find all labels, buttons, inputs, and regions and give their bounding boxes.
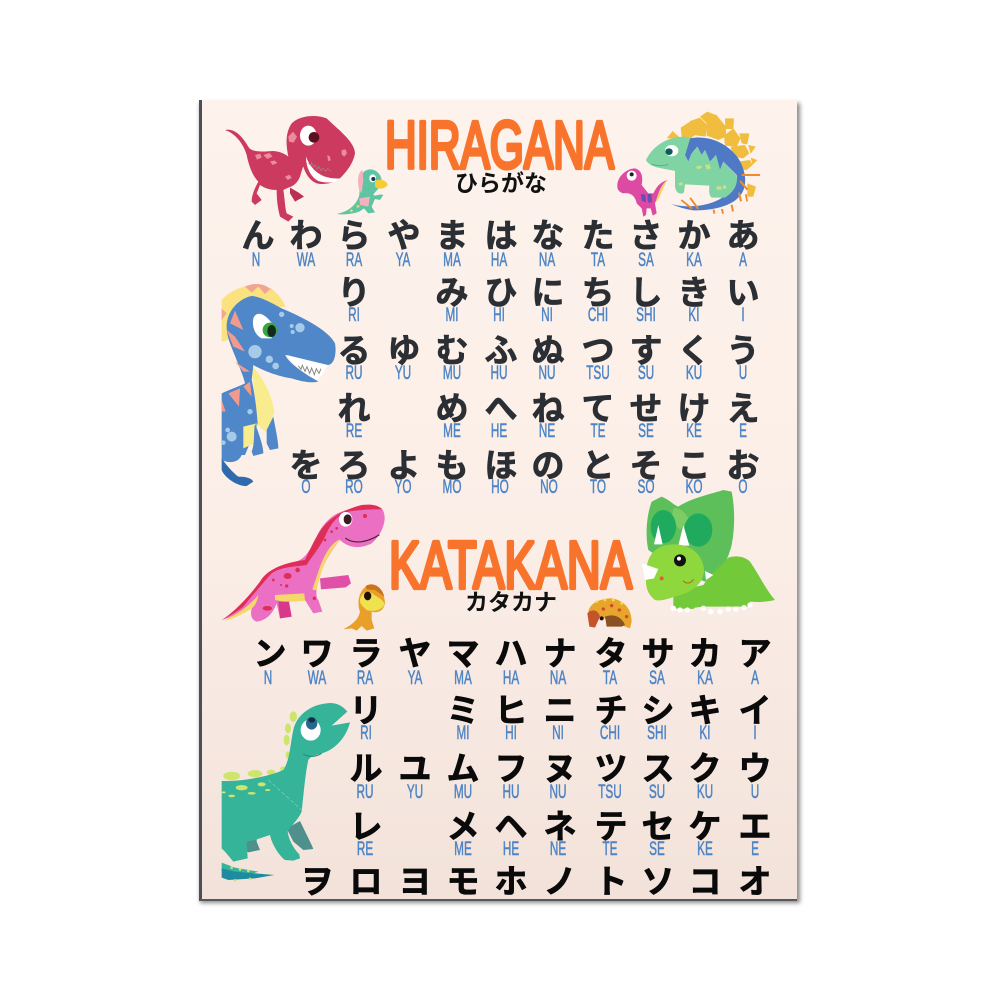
row: a-line: サ xyxy=(642,635,674,672)
row: i-line: SHI xyxy=(647,723,667,744)
row: o-line: よ xyxy=(388,447,420,484)
row: e-line: TE xyxy=(602,839,618,860)
row: e-line: け xyxy=(678,390,710,427)
row: u-line: す xyxy=(630,332,662,369)
row: e-line: TE xyxy=(590,421,606,442)
row: o-line xyxy=(290,447,760,498)
row: i-line: ヒ xyxy=(494,692,528,729)
row: a-line: KA xyxy=(686,250,702,271)
row: i-line: イ xyxy=(738,692,772,729)
row: e-line: HE xyxy=(491,421,507,442)
row: o-line: ノ xyxy=(544,863,576,900)
row: o-line: コ xyxy=(688,863,722,900)
row: e-line: SE xyxy=(638,421,654,442)
row: e-line: ME xyxy=(443,421,461,442)
row: e-line: ネ xyxy=(544,808,576,845)
row: o-line: RO xyxy=(345,477,363,498)
row: a-line: SA xyxy=(638,250,654,271)
row: e-line: て xyxy=(582,390,614,427)
row: o-line: モ xyxy=(446,863,480,900)
row: a-line: WA xyxy=(297,250,316,271)
row: u-line: ル xyxy=(350,750,382,787)
row: a-line: わ xyxy=(290,217,322,254)
row: e-line: KE xyxy=(697,839,713,860)
row: u-line: ぬ xyxy=(532,332,564,369)
row: u-line: つ xyxy=(582,332,614,369)
icon: orange ankylosaurus xyxy=(587,598,632,628)
row: u-line: ふ xyxy=(484,332,518,369)
row: i-line: り xyxy=(338,274,370,311)
row: i-line: NI xyxy=(541,305,553,326)
row: a-line: MA xyxy=(443,250,461,271)
row: o-line: オ xyxy=(738,863,772,900)
row: a-line: N xyxy=(252,250,260,271)
row: a-line: か xyxy=(678,217,710,254)
row: o-line: O xyxy=(738,477,748,498)
row: a-line: ん xyxy=(242,217,274,254)
row: a-line: YA xyxy=(408,668,423,689)
row: a-line: な xyxy=(532,217,564,254)
row: u-line: HU xyxy=(502,782,520,803)
row: o-line: ヲ xyxy=(300,863,334,900)
row: i-line: き xyxy=(678,274,710,311)
row: i-line: い xyxy=(726,274,760,311)
row: i-line: し xyxy=(630,274,662,311)
subtitle: hiragana in Japanese: ひらがな xyxy=(455,170,547,196)
row: i-line: HI xyxy=(493,305,505,326)
row: u-line: う xyxy=(726,332,760,369)
row: e-line: SE xyxy=(649,839,665,860)
row: u-line: HU xyxy=(490,363,508,384)
row: u-line: SU xyxy=(638,363,654,384)
row: u-line: NU xyxy=(549,782,567,803)
row: i-line: ち xyxy=(582,274,614,311)
row: i-line: CHI xyxy=(600,723,620,744)
row: i-line: チ xyxy=(594,692,628,729)
row: i-line: HI xyxy=(505,723,517,744)
row: e-line: RE xyxy=(346,421,362,442)
row: u-line: NU xyxy=(538,363,556,384)
subtitle: katakana in Japanese: カタカナ xyxy=(465,589,557,615)
row: o-line: お xyxy=(726,447,760,484)
row: u-line xyxy=(350,750,772,803)
hiragana grid xyxy=(242,217,760,498)
row: u-line: る xyxy=(338,332,370,369)
icon: small pink dinosaur xyxy=(617,168,667,217)
row: i-line: RI xyxy=(348,305,360,326)
row: o-line: SO xyxy=(637,477,655,498)
row: u-line: ム xyxy=(446,750,480,787)
row: a-line: KA xyxy=(697,668,713,689)
row: a-line: さ xyxy=(630,217,662,254)
row: u-line: RU xyxy=(345,363,363,384)
icon: teal dinosaur xyxy=(222,703,350,862)
row: i-line: RI xyxy=(360,723,372,744)
row: u-line: RU xyxy=(356,782,374,803)
row: i-line: ミ xyxy=(446,692,480,729)
row: i-line: に xyxy=(532,274,564,311)
row: u-line: TSU xyxy=(598,782,622,803)
row: i-line: シ xyxy=(642,692,674,729)
row: e-line: え xyxy=(726,390,760,427)
row: a-line: YA xyxy=(396,250,411,271)
row: a-line: HA xyxy=(491,250,508,271)
title: KATAKANA: KATAKANA xyxy=(389,528,632,603)
row: u-line xyxy=(338,332,760,384)
row: i-line: I xyxy=(741,305,745,326)
row: a-line: あ xyxy=(726,217,760,254)
row: a-line: ハ xyxy=(494,635,528,672)
row: e-line: れ xyxy=(338,390,370,427)
row: u-line: YU xyxy=(395,363,411,384)
row: o-line: O xyxy=(301,477,311,498)
row: e-line: KE xyxy=(686,421,702,442)
row: a-line: NA xyxy=(550,668,567,689)
row: i-line xyxy=(350,692,772,744)
row: a-line: MA xyxy=(454,668,472,689)
row: a-line: た xyxy=(582,217,614,254)
row: e-line: NE xyxy=(550,839,566,860)
row: i-line: KI xyxy=(688,305,700,326)
row: e-line: E xyxy=(751,839,759,860)
row: a-line: ナ xyxy=(544,635,576,672)
row: i-line: KI xyxy=(699,723,711,744)
row: i-line: I xyxy=(753,723,757,744)
row: a-line xyxy=(254,635,772,689)
row: i-line xyxy=(338,274,760,326)
row: i-line: キ xyxy=(688,692,722,729)
row: i-line: リ xyxy=(350,692,382,729)
row: o-line: も xyxy=(436,447,468,484)
row: o-line: と xyxy=(582,447,614,484)
row: i-line: MI xyxy=(456,723,470,744)
icon: red t-rex xyxy=(225,116,355,222)
icon: blue dinosaur xyxy=(221,284,336,486)
row: e-line: ヘ xyxy=(494,808,528,845)
row: u-line: ユ xyxy=(398,750,432,787)
row: u-line: ウ xyxy=(738,750,772,787)
row: e-line: セ xyxy=(642,808,674,845)
row: a-line: NA xyxy=(539,250,556,271)
row: o-line: KO xyxy=(685,477,703,498)
row: o-line: ろ xyxy=(338,447,370,484)
row: e-line: テ xyxy=(594,808,628,845)
row: a-line: HA xyxy=(503,668,520,689)
row: o-line: ほ xyxy=(484,447,518,484)
row: o-line: ソ xyxy=(642,863,674,900)
row: o-line: そ xyxy=(630,447,662,484)
row: a-line: ま xyxy=(436,217,468,254)
row: e-line: HE xyxy=(503,839,519,860)
row: u-line: む xyxy=(436,332,468,369)
row: u-line: TSU xyxy=(586,363,610,384)
row: u-line: フ xyxy=(494,750,528,787)
title: HIRAGANA: HIRAGANA xyxy=(385,108,614,183)
row: u-line: YU xyxy=(407,782,423,803)
row: a-line: WA xyxy=(308,668,327,689)
row: a-line: ン xyxy=(254,635,286,672)
row: o-line: TO xyxy=(590,477,606,498)
row: i-line: CHI xyxy=(588,305,608,326)
row: u-line: く xyxy=(678,332,710,369)
row: a-line: ワ xyxy=(300,635,334,672)
row: o-line: YO xyxy=(394,477,412,498)
icon: small teal dinosaur xyxy=(337,169,388,214)
icon: green triceratops xyxy=(642,490,775,614)
row: o-line: MO xyxy=(443,477,461,498)
row: i-line: MI xyxy=(445,305,459,326)
row: i-line: NI xyxy=(552,723,564,744)
row: e-line: ね xyxy=(532,390,564,427)
row: o-line: ロ xyxy=(350,863,382,900)
row: a-line: や xyxy=(388,217,420,254)
row: o-line: ホ xyxy=(494,863,528,900)
row: e-line: メ xyxy=(446,808,480,845)
row: u-line: U xyxy=(739,363,747,384)
row: u-line: KU xyxy=(697,782,713,803)
row: a-line: ヤ xyxy=(398,635,432,672)
row: e-line: へ xyxy=(484,390,518,427)
row: a-line: A xyxy=(739,250,747,271)
row: u-line: KU xyxy=(686,363,702,384)
row: a-line: TA xyxy=(591,250,605,271)
row: a-line: SA xyxy=(649,668,665,689)
row: o-line: ヨ xyxy=(398,863,432,900)
row: e-line: ME xyxy=(454,839,472,860)
row: o-line: NO xyxy=(540,477,558,498)
icon: small orange dinosaur xyxy=(343,584,385,631)
row: a-line: タ xyxy=(594,635,628,672)
row: e-line xyxy=(338,390,760,442)
row: o-line: こ xyxy=(678,447,710,484)
poster panel xyxy=(199,100,800,903)
row: i-line: ひ xyxy=(484,274,518,311)
row: e-line: せ xyxy=(630,390,662,427)
row: a-line: カ xyxy=(688,635,722,672)
row: e-line: レ xyxy=(350,808,382,845)
row: e-line xyxy=(350,808,772,860)
row: i-line: SHI xyxy=(636,305,656,326)
row: a-line: A xyxy=(751,668,759,689)
row: i-line: ニ xyxy=(544,692,576,729)
row: o-line: の xyxy=(532,447,564,484)
row: e-line: め xyxy=(436,390,468,427)
row: o-line xyxy=(300,863,772,900)
katakana grid xyxy=(254,635,772,900)
row: u-line: ゆ xyxy=(388,332,420,369)
row: a-line: RA xyxy=(346,250,363,271)
row: a-line: ら xyxy=(338,217,370,254)
row: a-line: ラ xyxy=(350,635,382,672)
icon: pink brachiosaurus xyxy=(222,505,385,622)
row: a-line: ア xyxy=(738,635,772,672)
icon: green stegosaurus xyxy=(646,112,760,214)
row: o-line: ト xyxy=(594,863,628,900)
row: a-line: は xyxy=(484,217,518,254)
icon: teal dinosaur tail piece xyxy=(222,863,274,882)
row: e-line: ケ xyxy=(688,808,722,845)
row: a-line: マ xyxy=(446,635,480,672)
row: u-line: SU xyxy=(649,782,665,803)
row: u-line: ツ xyxy=(594,750,628,787)
row: e-line: E xyxy=(739,421,747,442)
row: u-line: MU xyxy=(443,363,461,384)
row: a-line: TA xyxy=(603,668,617,689)
row: o-line: HO xyxy=(491,477,509,498)
row: a-line: N xyxy=(264,668,272,689)
row: e-line: NE xyxy=(539,421,555,442)
row: a-line: RA xyxy=(357,668,374,689)
row: o-line: を xyxy=(290,447,322,484)
row: u-line: ヌ xyxy=(544,750,576,787)
row: u-line: MU xyxy=(454,782,472,803)
row: u-line: ク xyxy=(688,750,722,787)
row: a-line xyxy=(242,217,760,271)
row: e-line: RE xyxy=(357,839,373,860)
row: u-line: ス xyxy=(642,750,674,787)
row: u-line: U xyxy=(751,782,759,803)
row: e-line: エ xyxy=(738,808,772,845)
row: i-line: み xyxy=(436,274,468,311)
